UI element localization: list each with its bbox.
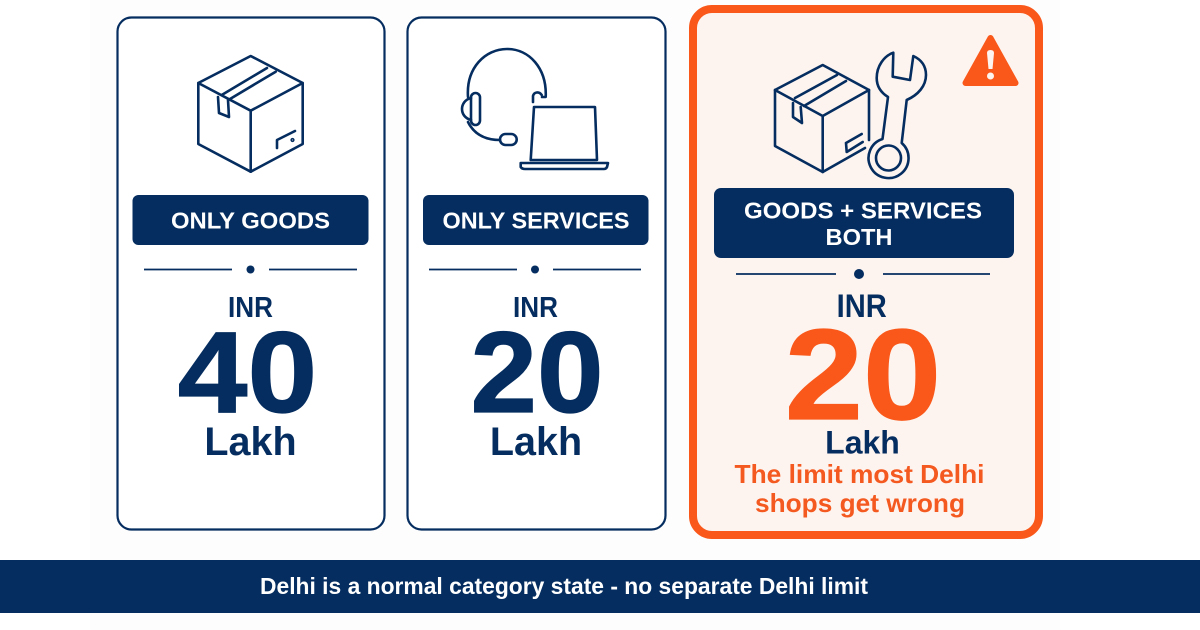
icon: headset and laptop	[462, 49, 608, 169]
amount: INR 20 Lakh: Lakh	[825, 424, 900, 460]
footer banner	[0, 560, 1200, 613]
label: only goods	[132, 195, 368, 245]
label: goods + services both: GOODS + SERVICES	[744, 198, 982, 224]
warning note	[734, 459, 984, 518]
amount: INR 40 Lakh: INR	[228, 291, 273, 323]
panel: goods and services both	[693, 9, 1039, 535]
footer banner: Delhi is a normal category state - no separate Delhi limit	[260, 573, 868, 599]
panel: only services	[408, 18, 666, 530]
divider	[736, 269, 990, 279]
amount: INR 20 Lakh: Lakh	[490, 420, 582, 464]
label: goods + services both	[714, 188, 1014, 258]
label: goods + services both: BOTH	[826, 224, 892, 250]
icon: box and wrench	[775, 53, 926, 178]
amount: INR 20 Lakh: 20	[470, 308, 604, 437]
amount: INR 20 Lakh: INR	[513, 291, 558, 323]
amount: INR 40 Lakh: Lakh	[204, 420, 297, 464]
amount: INR 40 Lakh: 40	[178, 309, 317, 437]
icon: box	[198, 56, 303, 172]
divider	[429, 266, 641, 274]
icon: warning triangle	[966, 38, 1016, 83]
warning note: shops get wrong	[755, 488, 965, 518]
label: only services	[423, 195, 648, 245]
amount: INR 20 Lakh: INR	[837, 289, 887, 324]
amount: INR 20 Lakh: 20	[785, 302, 941, 447]
panel: only goods	[118, 18, 384, 530]
label: only services: ONLY SERVICES	[442, 208, 630, 234]
label: only goods: ONLY GOODS	[171, 208, 330, 234]
divider	[144, 266, 357, 274]
warning note: The limit most Delhi	[734, 459, 984, 489]
